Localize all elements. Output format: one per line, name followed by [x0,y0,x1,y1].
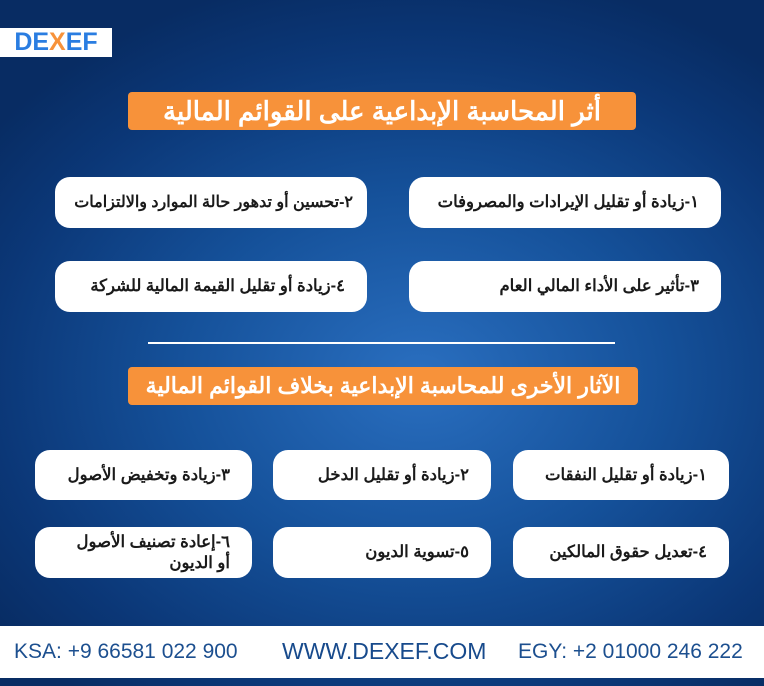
pill 10 [35,527,252,578]
pill 5 [513,450,729,500]
logo: DEXEF [14,28,98,56]
footer: website: WWW.DEXEF.COM [282,638,486,664]
pill 2: ٢-تحسين أو تدهور حالة الموارد والالتزامات [74,194,353,210]
pill 8 [513,527,729,578]
title: أثر المحاسبة الإبداعية على القوائم المالية [163,96,601,126]
footer: EGY: EGY: +2 01000 246 222 [518,640,743,663]
subtitle [128,367,638,405]
pill 2 [55,177,367,228]
pill 1: ١-زيادة أو تقليل الإيرادات والمصروفات [438,193,699,211]
pill 10: ٦-إعادة تصنيف الأصول [77,533,230,551]
pill 7 [35,450,252,500]
pill 3 [409,261,721,312]
title [128,92,636,130]
pill 8: ٤-تعديل حقوق المالكين [549,543,707,561]
pill 4 [55,261,367,312]
pill 6: ٢-زيادة أو تقليل الدخل [318,466,469,484]
footer: KSA: KSA: +9 66581 022 900 [14,640,238,663]
pill 7: ٣-زيادة وتخفيض الأصول [68,466,230,484]
footer [0,626,764,678]
pill 9 [273,527,491,578]
pill 9: ٥-تسوية الديون [365,543,469,561]
pill 6 [273,450,491,500]
pill 3: ٣-تأثير على الأداء المالي العام [499,277,699,295]
pill 1 [409,177,721,228]
subtitle: الآثار الأخرى للمحاسبة الإبداعية بخلاف القوائم المالية [146,373,620,398]
pill 5: ١-زيادة أو تقليل النفقات [545,466,707,484]
pill 4: ٤-زيادة أو تقليل القيمة المالية للشركة [90,277,345,295]
pill 10: أو الديون [169,554,230,572]
